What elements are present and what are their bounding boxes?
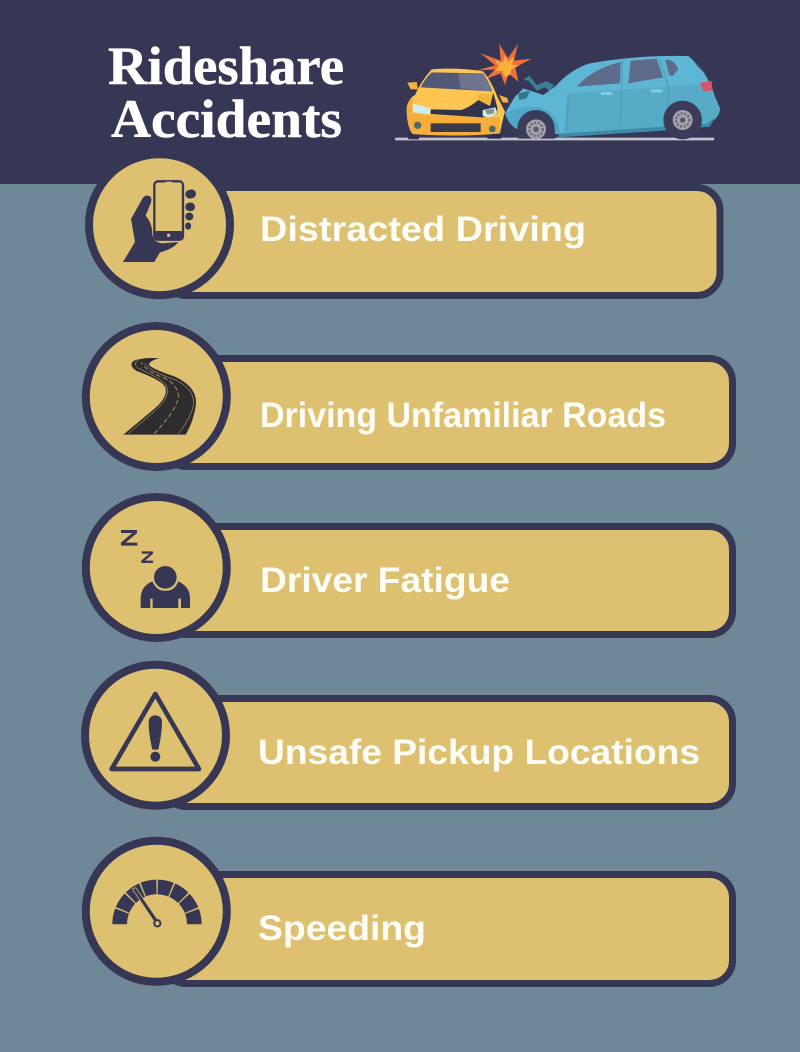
label: Driving Unfamiliar Roads <box>260 396 666 435</box>
header band <box>0 0 800 184</box>
icon: sleeping person <box>121 530 190 608</box>
blue car <box>505 56 720 137</box>
icon: speedometer <box>120 887 194 926</box>
title <box>108 36 344 149</box>
panel: distracted driving <box>89 154 720 296</box>
circle badge <box>85 665 226 806</box>
label bar <box>163 698 732 806</box>
circle badge <box>86 841 227 982</box>
label: Driver Fatigue <box>260 561 510 600</box>
front wheel <box>517 110 555 139</box>
label: Unsafe Pickup Locations <box>258 733 700 772</box>
title: Rideshare <box>108 36 344 96</box>
illustration: two cars colliding <box>395 44 720 140</box>
circle badge <box>89 154 230 295</box>
panel: speeding <box>86 841 733 984</box>
panel: driving unfamiliar roads <box>86 326 733 467</box>
icon: hand holding phone <box>123 181 197 262</box>
panel: unsafe pickup locations <box>85 665 732 806</box>
label bar <box>163 526 732 634</box>
icon: winding road <box>123 358 196 435</box>
yellow car <box>407 69 509 139</box>
title: Accidents <box>111 89 342 149</box>
label bar <box>163 188 720 296</box>
label bar <box>163 874 732 984</box>
label bar <box>163 358 732 466</box>
label: Speeding <box>258 909 426 948</box>
icon: warning triangle <box>112 694 199 769</box>
explosion star <box>476 44 532 85</box>
label: Distracted Driving <box>260 210 586 249</box>
rear wheel <box>663 101 702 139</box>
panel: driver fatigue <box>86 497 733 638</box>
road line <box>395 138 714 140</box>
circle badge <box>86 326 227 467</box>
circle badge <box>86 497 227 638</box>
